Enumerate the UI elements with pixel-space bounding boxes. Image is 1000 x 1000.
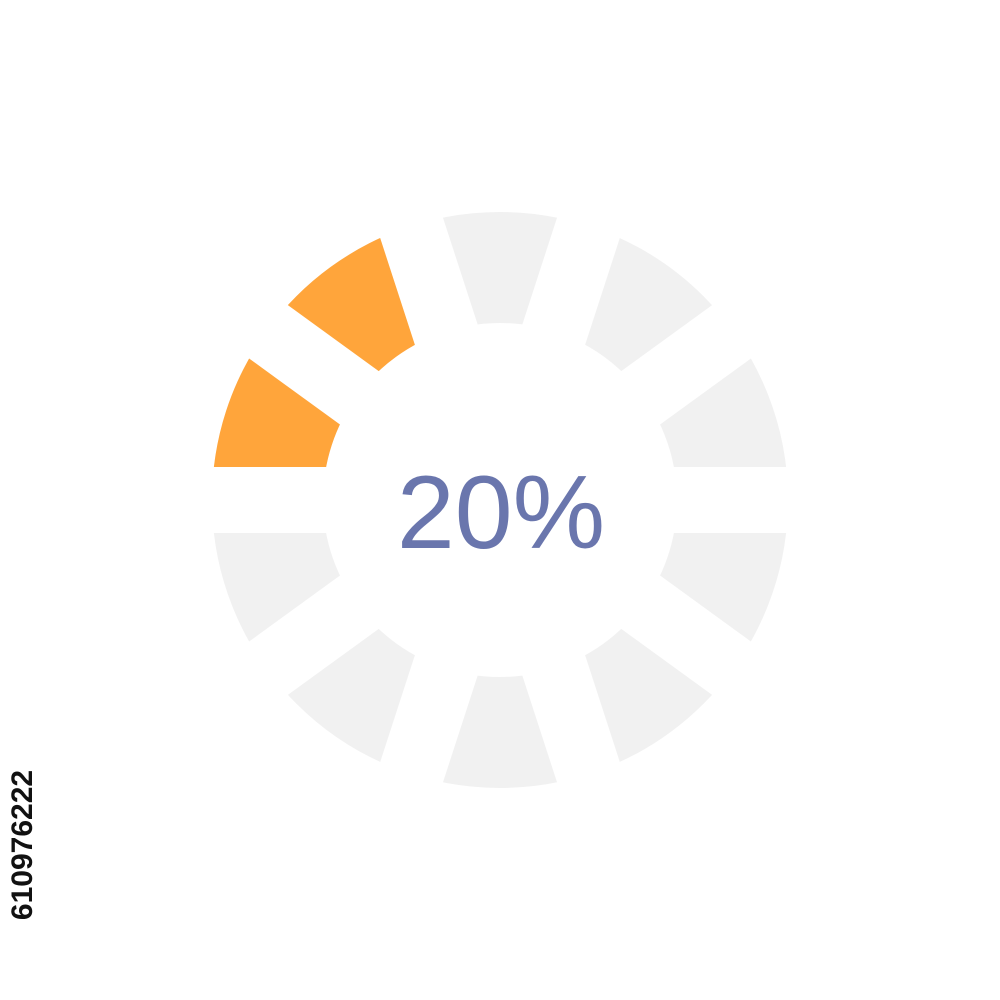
segment gaps xyxy=(180,196,820,804)
ring: orange progress segments xyxy=(212,226,445,500)
watermark id text: 610976222 xyxy=(6,770,39,920)
ring: grey background track xyxy=(268,268,732,732)
percentage label: 20% xyxy=(397,455,605,571)
